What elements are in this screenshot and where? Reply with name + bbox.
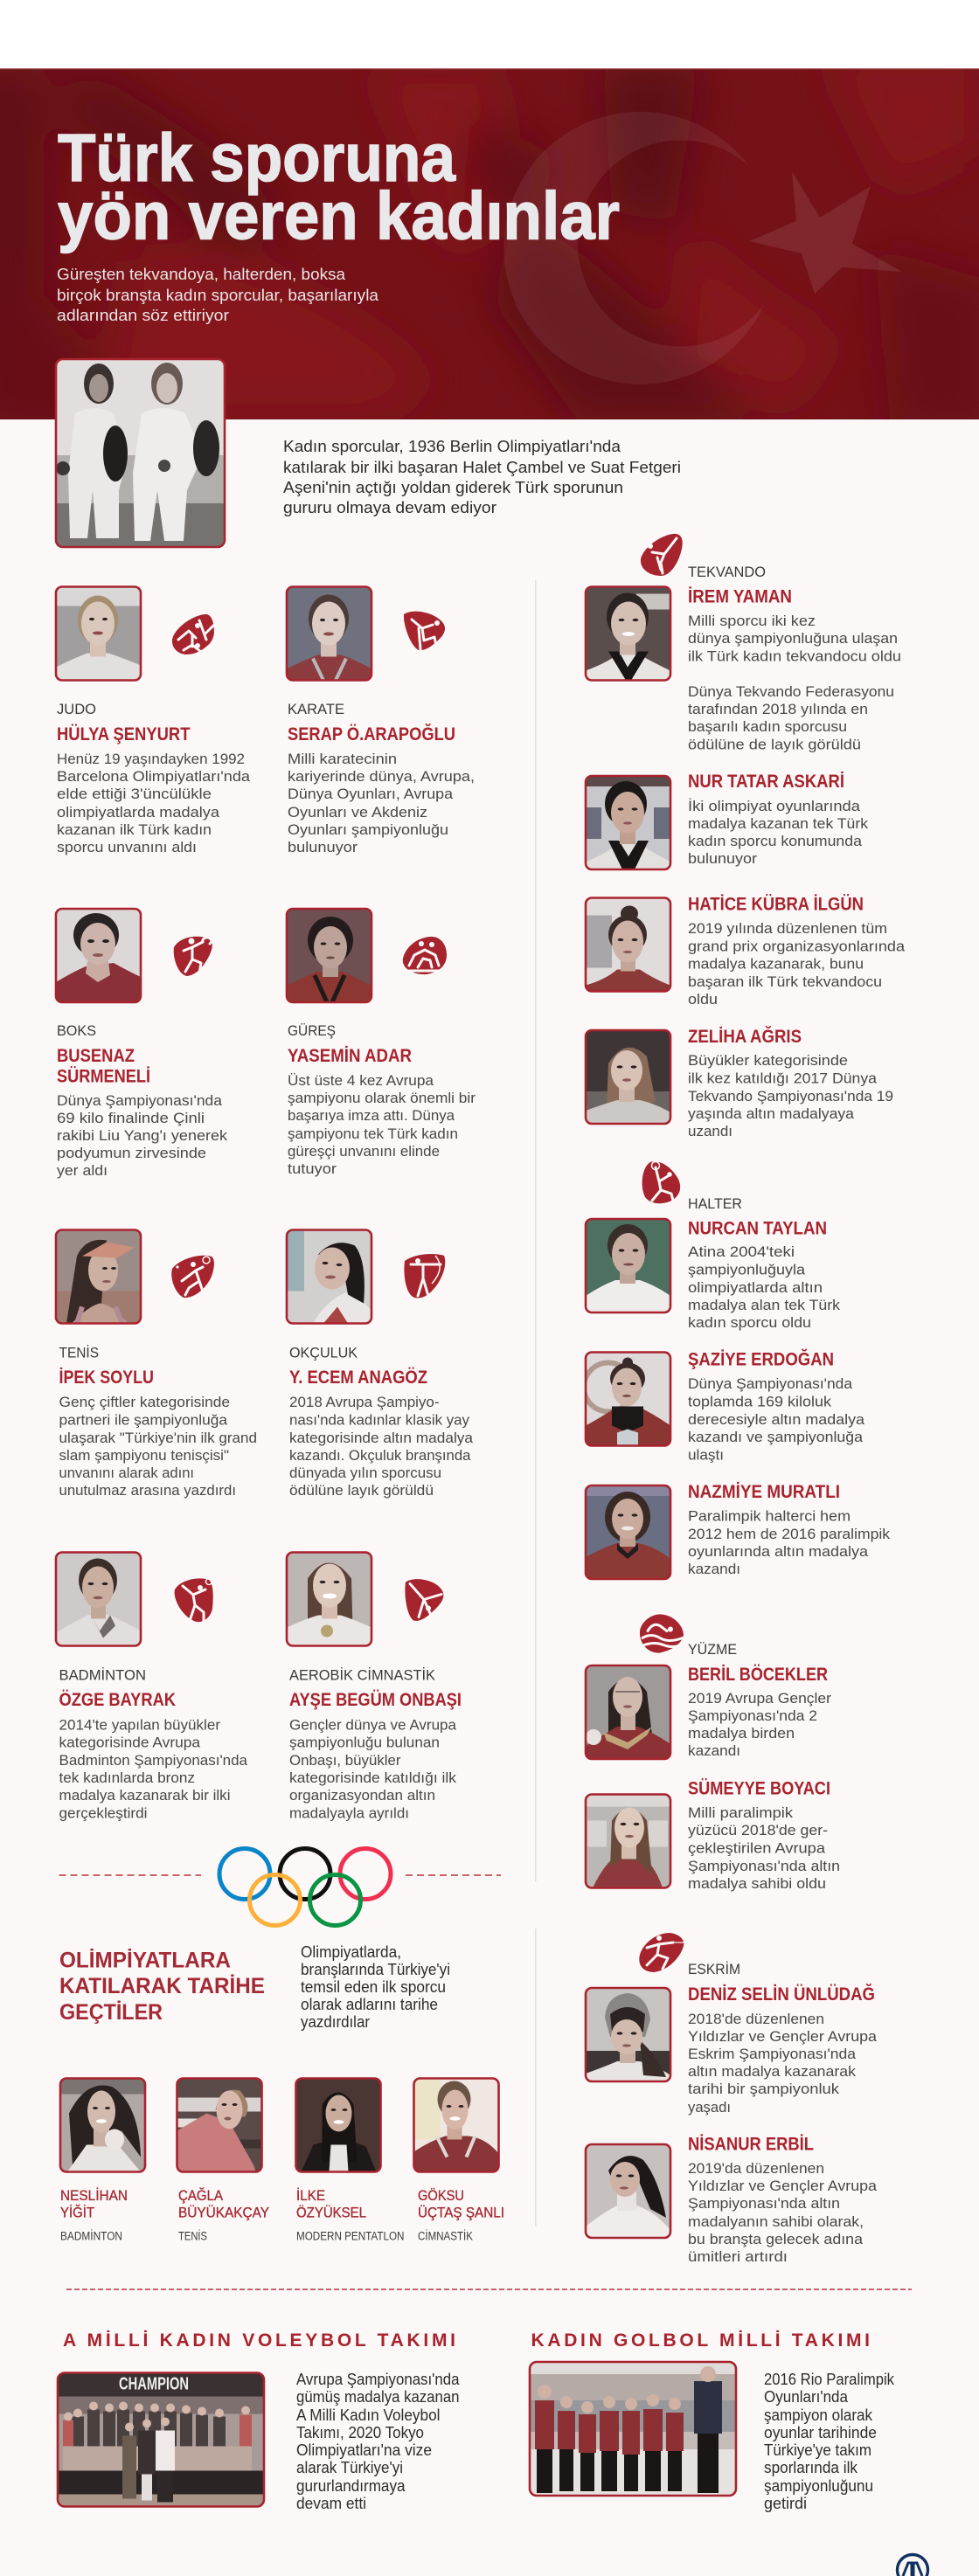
- subtitle: adlarından söz ettiriyor: [57, 307, 229, 324]
- name: [296, 2187, 366, 2221]
- text block: Türkiye'ye takım: [764, 2441, 871, 2459]
- panel: yüzme: [586, 1614, 840, 1892]
- bio: Tekvando Şampiyonası'nda 19: [688, 1089, 893, 1104]
- bio: kategorisinde altın madalya: [289, 1430, 474, 1446]
- athlete: Beril Böcekler: [586, 1665, 832, 1759]
- bio: [688, 2161, 878, 2265]
- panel: tenis, İpek Soylu: [56, 1230, 257, 1499]
- bio: Dünya Oyunları, Avrupa: [288, 786, 454, 802]
- photo: [586, 587, 670, 680]
- bio: [688, 2012, 878, 2116]
- bio: bulunuyor: [688, 851, 758, 867]
- photo: [295, 2078, 381, 2172]
- athlete: Sümeyye Boyacı: [586, 1779, 840, 1892]
- bio: güreşçi unvanını elinde: [288, 1144, 440, 1160]
- bio: ilk Türk kadın tekvandocu oldu: [688, 648, 901, 664]
- bio: uzandı: [688, 1124, 733, 1139]
- team photo: [530, 2362, 736, 2496]
- icon: tekvando: [641, 534, 683, 576]
- photo: [586, 1485, 670, 1579]
- bio: sporcu unvanını aldı: [57, 840, 197, 855]
- icon: badminton: [175, 1578, 213, 1622]
- athlete: Nazmiye Muratlı: [586, 1482, 891, 1579]
- bio: yaşadı: [688, 2100, 731, 2116]
- intro text: gururu olmaya devam ediyor: [283, 499, 496, 516]
- bio: Onbaşı, büyükler: [289, 1753, 401, 1769]
- bio: yaşında altın madalyaya: [688, 1106, 855, 1122]
- emblem: crescent and star watermark: [503, 112, 902, 384]
- sport label: JUDO: [57, 701, 96, 717]
- bio: oyunlarında altın madalya: [688, 1544, 869, 1560]
- panel: Neslihan Yiğit: [60, 2078, 145, 2242]
- name: BERİL BÖCEKLER: [688, 1665, 828, 1685]
- sport label: BADMİNTON: [60, 2230, 122, 2242]
- bio: şampiyonluğuyla: [688, 1262, 806, 1278]
- text block: devam etti: [296, 2495, 366, 2512]
- panel: İlke Özyüksel: [295, 2078, 404, 2242]
- bio: [688, 1508, 891, 1577]
- photo: [56, 909, 141, 1002]
- name: İPEK SOYLU: [59, 1368, 154, 1388]
- name: NESLİHAN: [60, 2187, 128, 2204]
- bio: Büyükler kategorisinde: [688, 1053, 848, 1069]
- column separator: [535, 580, 537, 2226]
- bio: [288, 1073, 476, 1177]
- bio: unvanını alarak adını: [59, 1465, 194, 1481]
- bio: ümitleri artırdı: [688, 2249, 788, 2265]
- name: ZELİHA AĞRIS: [688, 1026, 802, 1047]
- title: yön veren kadınlar: [58, 178, 620, 253]
- bio: şampiyonluğu bulunan: [289, 1735, 440, 1751]
- bio: şampiyonu olarak önemli bir: [288, 1091, 476, 1106]
- heading: Olimpiyatlara katılarak tarihe geçtiler: OLİMPİYATLARA: [59, 1949, 231, 1973]
- photo: [60, 2078, 145, 2172]
- icon: tenis: [171, 1256, 214, 1298]
- name: ÖZYÜKSEL: [296, 2204, 366, 2221]
- bio: ulaşarak "Türkiye'nin ilk grand: [59, 1430, 257, 1446]
- star: [749, 171, 902, 294]
- name: DENİZ SELİN ÜNLÜDAĞ: [688, 1984, 875, 2005]
- name: AYŞE BEGÜM ONBAŞI: [289, 1690, 462, 1710]
- name: [178, 2187, 269, 2221]
- bio: gerçekleştirdi: [59, 1805, 147, 1821]
- bio: Üst üste 4 kez Avrupa: [288, 1073, 434, 1089]
- sport label: GÜREŞ: [288, 1022, 336, 1039]
- name: İLKE: [296, 2187, 325, 2204]
- bio: Dünya Şampiyonası'nda: [688, 1376, 853, 1392]
- bio: Dünya Şampiyonası'nda: [57, 1093, 223, 1109]
- name: ÇAĞLA: [178, 2187, 224, 2204]
- title: Türk sporuna: [58, 121, 456, 196]
- bio: kadın sporcu oldu: [688, 1315, 811, 1331]
- bio: [688, 921, 906, 1008]
- photo: [586, 1795, 670, 1887]
- photo: [177, 2078, 262, 2172]
- text block: A Milli Kadın Voleybol: [296, 2406, 441, 2424]
- sport label: TENİS: [178, 2230, 207, 2242]
- sport label: TEKVANDO: [688, 564, 766, 580]
- bio: tarihi bir şampiyonluk: [688, 2081, 840, 2097]
- olympic divider with rings: [59, 1849, 501, 1926]
- name: ÖZGE BAYRAK: [59, 1690, 176, 1710]
- bio: bu branşta gelecek adına: [688, 2232, 864, 2247]
- panel: güreş, Yasemin Adar: [287, 909, 476, 1177]
- bio: Genç çiftler kategorisinde: [59, 1395, 230, 1410]
- bio: tarafından 2018 yılında en: [688, 702, 868, 717]
- bio: Milli sporcu iki kez: [688, 613, 816, 629]
- sport label: OKÇULUK: [289, 1344, 358, 1361]
- athlete: Nisanur Erbil: [586, 2134, 878, 2265]
- team photo: [58, 2373, 264, 2506]
- athlete: Nurcan Taylan: [586, 1218, 841, 1331]
- bio: unutulmaz arasına yazdırdı: [59, 1483, 236, 1499]
- panel: Göksu Üçtaş Şanlı: [414, 2078, 504, 2242]
- name: HATİCE KÜBRA İLGÜN: [688, 895, 864, 914]
- heading: KADIN GOLBOL MİLLİ TAKIMI: [531, 2330, 870, 2351]
- photo: [287, 909, 371, 1002]
- bio: Yıldızlar ve Gençler Avrupa: [688, 2029, 878, 2045]
- bio: kazandı: [688, 1562, 740, 1577]
- panel: tekvando: [586, 534, 906, 1139]
- panel: Kadın Golbol Milli Takımı: [530, 2330, 895, 2512]
- sport label: HALTER: [688, 1195, 742, 1212]
- bio: [688, 798, 869, 867]
- photo: [56, 587, 141, 680]
- bio: Henüz 19 yaşındayken 1992: [57, 751, 245, 767]
- name: YASEMİN ADAR: [288, 1046, 412, 1066]
- bio: olimpiyatlarda madalya: [57, 805, 220, 821]
- bio: başarılı kadın sporcusu: [688, 719, 847, 735]
- icon: eskrim: [639, 1933, 684, 1972]
- bio: ilk kez katıldığı 2017 Dünya: [688, 1071, 878, 1087]
- bio: tek kadınlarda bronz: [59, 1770, 195, 1786]
- photo: [586, 2144, 670, 2238]
- bio: yüzücü 2018'de ger-: [688, 1823, 828, 1839]
- team photo: CHAMPION: [119, 2375, 189, 2394]
- bio: Şampiyonası'nda altın: [688, 2196, 840, 2212]
- panel: eskrim: [586, 1933, 878, 2265]
- text block: olympic intro: temsil eden ilk sporcu: [301, 1978, 446, 1996]
- bio: 2012 hem de 2016 paralimpik: [688, 1527, 891, 1542]
- bio: [688, 1244, 841, 1331]
- bio: Paralimpik halterci hem: [688, 1508, 851, 1524]
- bio: madalya sahibi oldu: [688, 1876, 826, 1892]
- bio: madalyanın sahibi olarak,: [688, 2214, 864, 2230]
- bio: [57, 1093, 228, 1179]
- bio: kariyerinde dünya, Avrupa,: [288, 769, 475, 785]
- bio: [688, 613, 901, 753]
- intro text: Kadın sporcular, 1936 Berlin Olimpiyatları'nda: [283, 438, 621, 455]
- intro text: Aşeni'nin açtığı yoldan giderek Türk sporunun: [283, 479, 623, 496]
- bio: bulunuyor: [288, 840, 358, 855]
- bio: ödülüne de layık görüldü: [688, 737, 861, 753]
- bio: Oyunları ve Akdeniz: [288, 805, 427, 821]
- text block: getirdi: [764, 2495, 807, 2512]
- bio: [57, 751, 251, 855]
- bio: tutuyor: [288, 1161, 337, 1177]
- sport label: ESKRİM: [688, 1961, 740, 1977]
- bio: Milli paralimpik: [688, 1805, 794, 1821]
- text block: olympic intro: Olimpiyatlarda,: [301, 1943, 401, 1961]
- photo: [56, 1230, 141, 1323]
- sport label: BOKS: [57, 1022, 96, 1039]
- sport label: MODERN PENTATLON: [296, 2230, 404, 2242]
- photo: [586, 1219, 670, 1312]
- bio: 2018 Avrupa Şampiyo-: [289, 1395, 439, 1410]
- bio: Eskrim Şampiyonası'nda: [688, 2046, 857, 2062]
- name: GÖKSU: [418, 2187, 464, 2204]
- photo: [56, 1552, 141, 1646]
- name: [60, 2187, 128, 2221]
- bio: 69 kilo finalinde Çinli: [57, 1111, 205, 1126]
- panel: Çağla Büyükakçay: [177, 2078, 269, 2242]
- bio: altın madalya kazanarak: [688, 2064, 857, 2080]
- bio: [59, 1718, 248, 1821]
- photo: [586, 1665, 670, 1759]
- heading: A MİLLİ KADIN VOLEYBOL TAKIMI: [63, 2330, 455, 2351]
- photo: [287, 587, 371, 680]
- text block: oyunlar tarihinde: [764, 2424, 877, 2441]
- panel: halter: [584, 1161, 891, 1579]
- bio: [688, 1691, 832, 1759]
- bio: [59, 1395, 257, 1499]
- bio: şampiyonu tek Türk kadın: [288, 1126, 458, 1142]
- bio: nası'nda kadınlar klasik yay: [289, 1412, 470, 1428]
- sport label: AEROBİK CİMNASTİK: [289, 1667, 436, 1683]
- bio: 2014'te yapılan büyükler: [59, 1718, 221, 1734]
- bio: Yıldızlar ve Gençler Avrupa: [688, 2178, 878, 2194]
- sport label: CİMNASTİK: [418, 2230, 473, 2242]
- crescent: [503, 112, 765, 384]
- name: HÜLYA ŞENYURT: [57, 724, 191, 744]
- panel: judo, Hülya Şenyurt: [56, 587, 251, 855]
- photo: [287, 1552, 371, 1646]
- photo: [586, 898, 670, 991]
- athlete: Hatice Kübra İlgün: [586, 895, 906, 1008]
- text block: [764, 2371, 895, 2512]
- icon: olympic rings: [219, 1849, 391, 1926]
- bio: dünya şampiyonluğuna ulaşan: [688, 631, 898, 647]
- name: NİSANUR ERBİL: [688, 2134, 814, 2155]
- text block: olympic intro: yazdırdılar: [301, 2013, 370, 2031]
- name: [57, 1046, 150, 1087]
- sport label: YÜZME: [688, 1641, 737, 1658]
- text block: Takımı, 2020 Tokyo: [296, 2424, 424, 2441]
- icon: halter: [642, 1161, 680, 1203]
- bio: madalya birden: [688, 1726, 795, 1742]
- sport label: BADMİNTON: [59, 1667, 146, 1683]
- bio: Atina 2004'teki: [688, 1244, 795, 1260]
- bio: ödülüne layık görüldü: [289, 1483, 434, 1499]
- text block: şampiyon olarak: [764, 2406, 873, 2424]
- photo: [586, 776, 670, 869]
- name: Y. ECEM ANAGÖZ: [289, 1368, 427, 1388]
- text block: alarak Türkiye'yi: [296, 2459, 403, 2476]
- bio: madalya kazanarak, bunu: [688, 956, 864, 972]
- bio: organizasyondan altın: [289, 1788, 435, 1804]
- banner: red flag background: [0, 52, 979, 437]
- bio: olimpiyatlarda altın: [688, 1280, 823, 1296]
- icon: yüzme: [640, 1614, 684, 1653]
- bio: oldu: [688, 992, 718, 1008]
- name: BUSENAZ: [57, 1046, 135, 1066]
- title: [58, 121, 620, 253]
- bio: kategorisinde Avrupa: [59, 1735, 201, 1751]
- bio: kazanan ilk Türk kadın: [57, 822, 212, 838]
- bio: 2019 yılında düzenlenen tüm: [688, 921, 887, 937]
- bio: 2019 Avrupa Gençler: [688, 1691, 832, 1707]
- panel: okçuluk, Y. Ecem Anagöz: [287, 1230, 474, 1499]
- icon: judo: [172, 614, 214, 654]
- bio: İki olimpiyat oyunlarında: [688, 798, 861, 814]
- text block: sporlarında ilk: [764, 2459, 858, 2476]
- bio: [688, 1805, 840, 1892]
- athlete: Deniz Selin Ünlüdağ: [586, 1984, 878, 2116]
- bio: kategorisinde katıldığı ilk: [289, 1770, 457, 1786]
- bio: Badminton Şampiyonası'nda: [59, 1753, 248, 1769]
- bio: Barcelona Olimpiyatları'nda: [57, 769, 251, 785]
- text block: Olimpiyatları'na vize: [296, 2441, 432, 2459]
- bio: derecesiyle altın madalya: [688, 1412, 865, 1428]
- name: NURCAN TAYLAN: [688, 1218, 827, 1239]
- text block: gümüş madalya kazanan: [296, 2388, 460, 2406]
- heading: Olimpiyatlara katılarak tarihe geçtiler: [59, 1949, 265, 2025]
- bio: ulaştı: [688, 1447, 724, 1463]
- athlete: Nur Tatar Askari: [586, 772, 869, 869]
- bio: madalya alan tek Türk: [688, 1298, 841, 1313]
- icon: cimnastik: [405, 1579, 443, 1621]
- photo: [586, 1988, 670, 2081]
- photo: [586, 1030, 670, 1124]
- icon: boks: [174, 937, 212, 976]
- name: [418, 2187, 504, 2221]
- photo: [584, 1353, 670, 1445]
- bio: partneri ile şampiyonluğa: [59, 1412, 228, 1428]
- bio: rakibi Liu Yang'ı yenerek: [57, 1128, 228, 1144]
- bio: [289, 1718, 457, 1821]
- icon: güreş: [403, 937, 447, 974]
- photo: Halet Çambel and Suat Fetgeri Aşeni: [56, 359, 225, 547]
- name: YİĞİT: [60, 2204, 94, 2221]
- bio: madalya kazanarak bir ilki: [59, 1788, 231, 1804]
- heading: Olimpiyatlara katılarak tarihe geçtiler: KATILARAK TARİHE: [59, 1974, 265, 1998]
- photo: [414, 2078, 498, 2172]
- bio: kadın sporcu konumunda: [688, 834, 863, 849]
- bio: yer aldı: [57, 1163, 108, 1179]
- athlete: İrem Yaman: [586, 587, 901, 753]
- bio: kazandı. Okçuluk branşında: [289, 1448, 471, 1464]
- name: NAZMİYE MURATLI: [688, 1482, 840, 1502]
- athlete: Zeliha Ağrıs: [586, 1026, 893, 1139]
- icon: okçuluk: [404, 1254, 445, 1298]
- bio: [688, 1376, 865, 1463]
- name: SÜMEYYE BOYACI: [688, 1779, 830, 1798]
- subtitle: Güreşten tekvandoya, halterden, boksa: [57, 266, 346, 283]
- bio: madalya kazanan tek Türk: [688, 816, 869, 832]
- bio: başarıya imza attı. Dünya: [288, 1108, 455, 1124]
- text block: olympic intro: olarak adlarını tarihe: [301, 1996, 438, 2013]
- bio: Milli karatecinin: [288, 751, 397, 767]
- intro text: katılarak bir ilki başaran Halet Çambel ve Suat Fetgeri: [283, 459, 681, 476]
- bio: madalyayla ayrıldı: [289, 1805, 409, 1821]
- bio: [289, 1395, 474, 1499]
- panel: aerobik cimnastik, Ayşe Begüm Onbaşı: [287, 1552, 462, 1821]
- text block: Avrupa Şampiyonası'nda: [296, 2371, 460, 2388]
- text block: şampiyonluğunu: [764, 2477, 873, 2495]
- panel: boks, Busenaz Sürmeneli: [56, 909, 228, 1179]
- bio: grand prix organizasyonlarında: [688, 938, 906, 954]
- bio: [688, 1053, 893, 1139]
- name: SERAP Ö.ARAPOĞLU: [288, 724, 455, 744]
- bio: Gençler dünya ve Avrupa: [289, 1718, 457, 1734]
- intro text: [283, 438, 681, 516]
- bio: elde ettiği 3'üncülükle: [57, 786, 212, 802]
- bio: slam şampiyonu tenisçisi": [59, 1448, 229, 1464]
- bio: kazandı ve şampiyonluğa: [688, 1430, 864, 1445]
- bio: Dünya Tekvando Federasyonu: [688, 684, 894, 700]
- bio: Şampiyonası'nda 2: [688, 1708, 817, 1724]
- name: BÜYÜKAKÇAY: [178, 2204, 269, 2221]
- heading: Olimpiyatlara katılarak tarihe geçtiler: GEÇTİLER: [59, 2000, 163, 2025]
- bio: başaran ilk Türk tekvandocu: [688, 974, 882, 990]
- text block: olympic intro: branşlarında Türkiye'yi: [301, 1961, 450, 1978]
- sport label: KARATE: [288, 701, 344, 717]
- logo: AA: [897, 2555, 928, 2576]
- bio: kazandı: [688, 1743, 740, 1759]
- text block: gururlandırmaya: [296, 2477, 406, 2495]
- panel: badminton, Özge Bayrak: [56, 1552, 248, 1821]
- subtitle: birçok branşta kadın sporcular, başarılarıyla: [57, 287, 379, 304]
- bio: çekleştirilen Avrupa: [688, 1840, 826, 1856]
- text block: [296, 2371, 460, 2512]
- name: ŞAZİYE ERDOĞAN: [688, 1349, 834, 1370]
- bio: Oyunları şampiyonluğu: [288, 822, 448, 838]
- bio: [288, 751, 475, 855]
- bio: 2019'da düzenlenen: [688, 2161, 824, 2177]
- bio: dünyada yılın sporcusu: [289, 1465, 441, 1481]
- photo: [287, 1230, 371, 1323]
- bio: Şampiyonası'nda altın: [688, 1859, 840, 1874]
- name: NUR TATAR ASKARİ: [688, 772, 844, 792]
- icon: karate: [404, 612, 445, 650]
- panel: karate, Serap Ö. Arapoğlu: [287, 587, 475, 855]
- name: SÜRMENELİ: [57, 1066, 150, 1087]
- bio: 2018'de düzenlenen: [688, 2012, 824, 2027]
- sport label: TENİS: [59, 1344, 99, 1361]
- bio: podyumun zirvesinde: [57, 1146, 206, 1161]
- text block: olympic intro: [301, 1943, 450, 2031]
- subtitle: [57, 266, 379, 324]
- athlete: Şaziye Erdoğan: [584, 1349, 865, 1463]
- text block: 2016 Rio Paralimpik: [764, 2371, 895, 2388]
- name: İREM YAMAN: [688, 587, 792, 606]
- panel: A Milli Kadın Voleybol Takımı: [58, 2330, 460, 2512]
- name: ÜÇTAŞ ŞANLI: [418, 2204, 504, 2221]
- text block: Oyunları'nda: [764, 2388, 849, 2406]
- bio: toplamda 169 kiloluk: [688, 1395, 832, 1410]
